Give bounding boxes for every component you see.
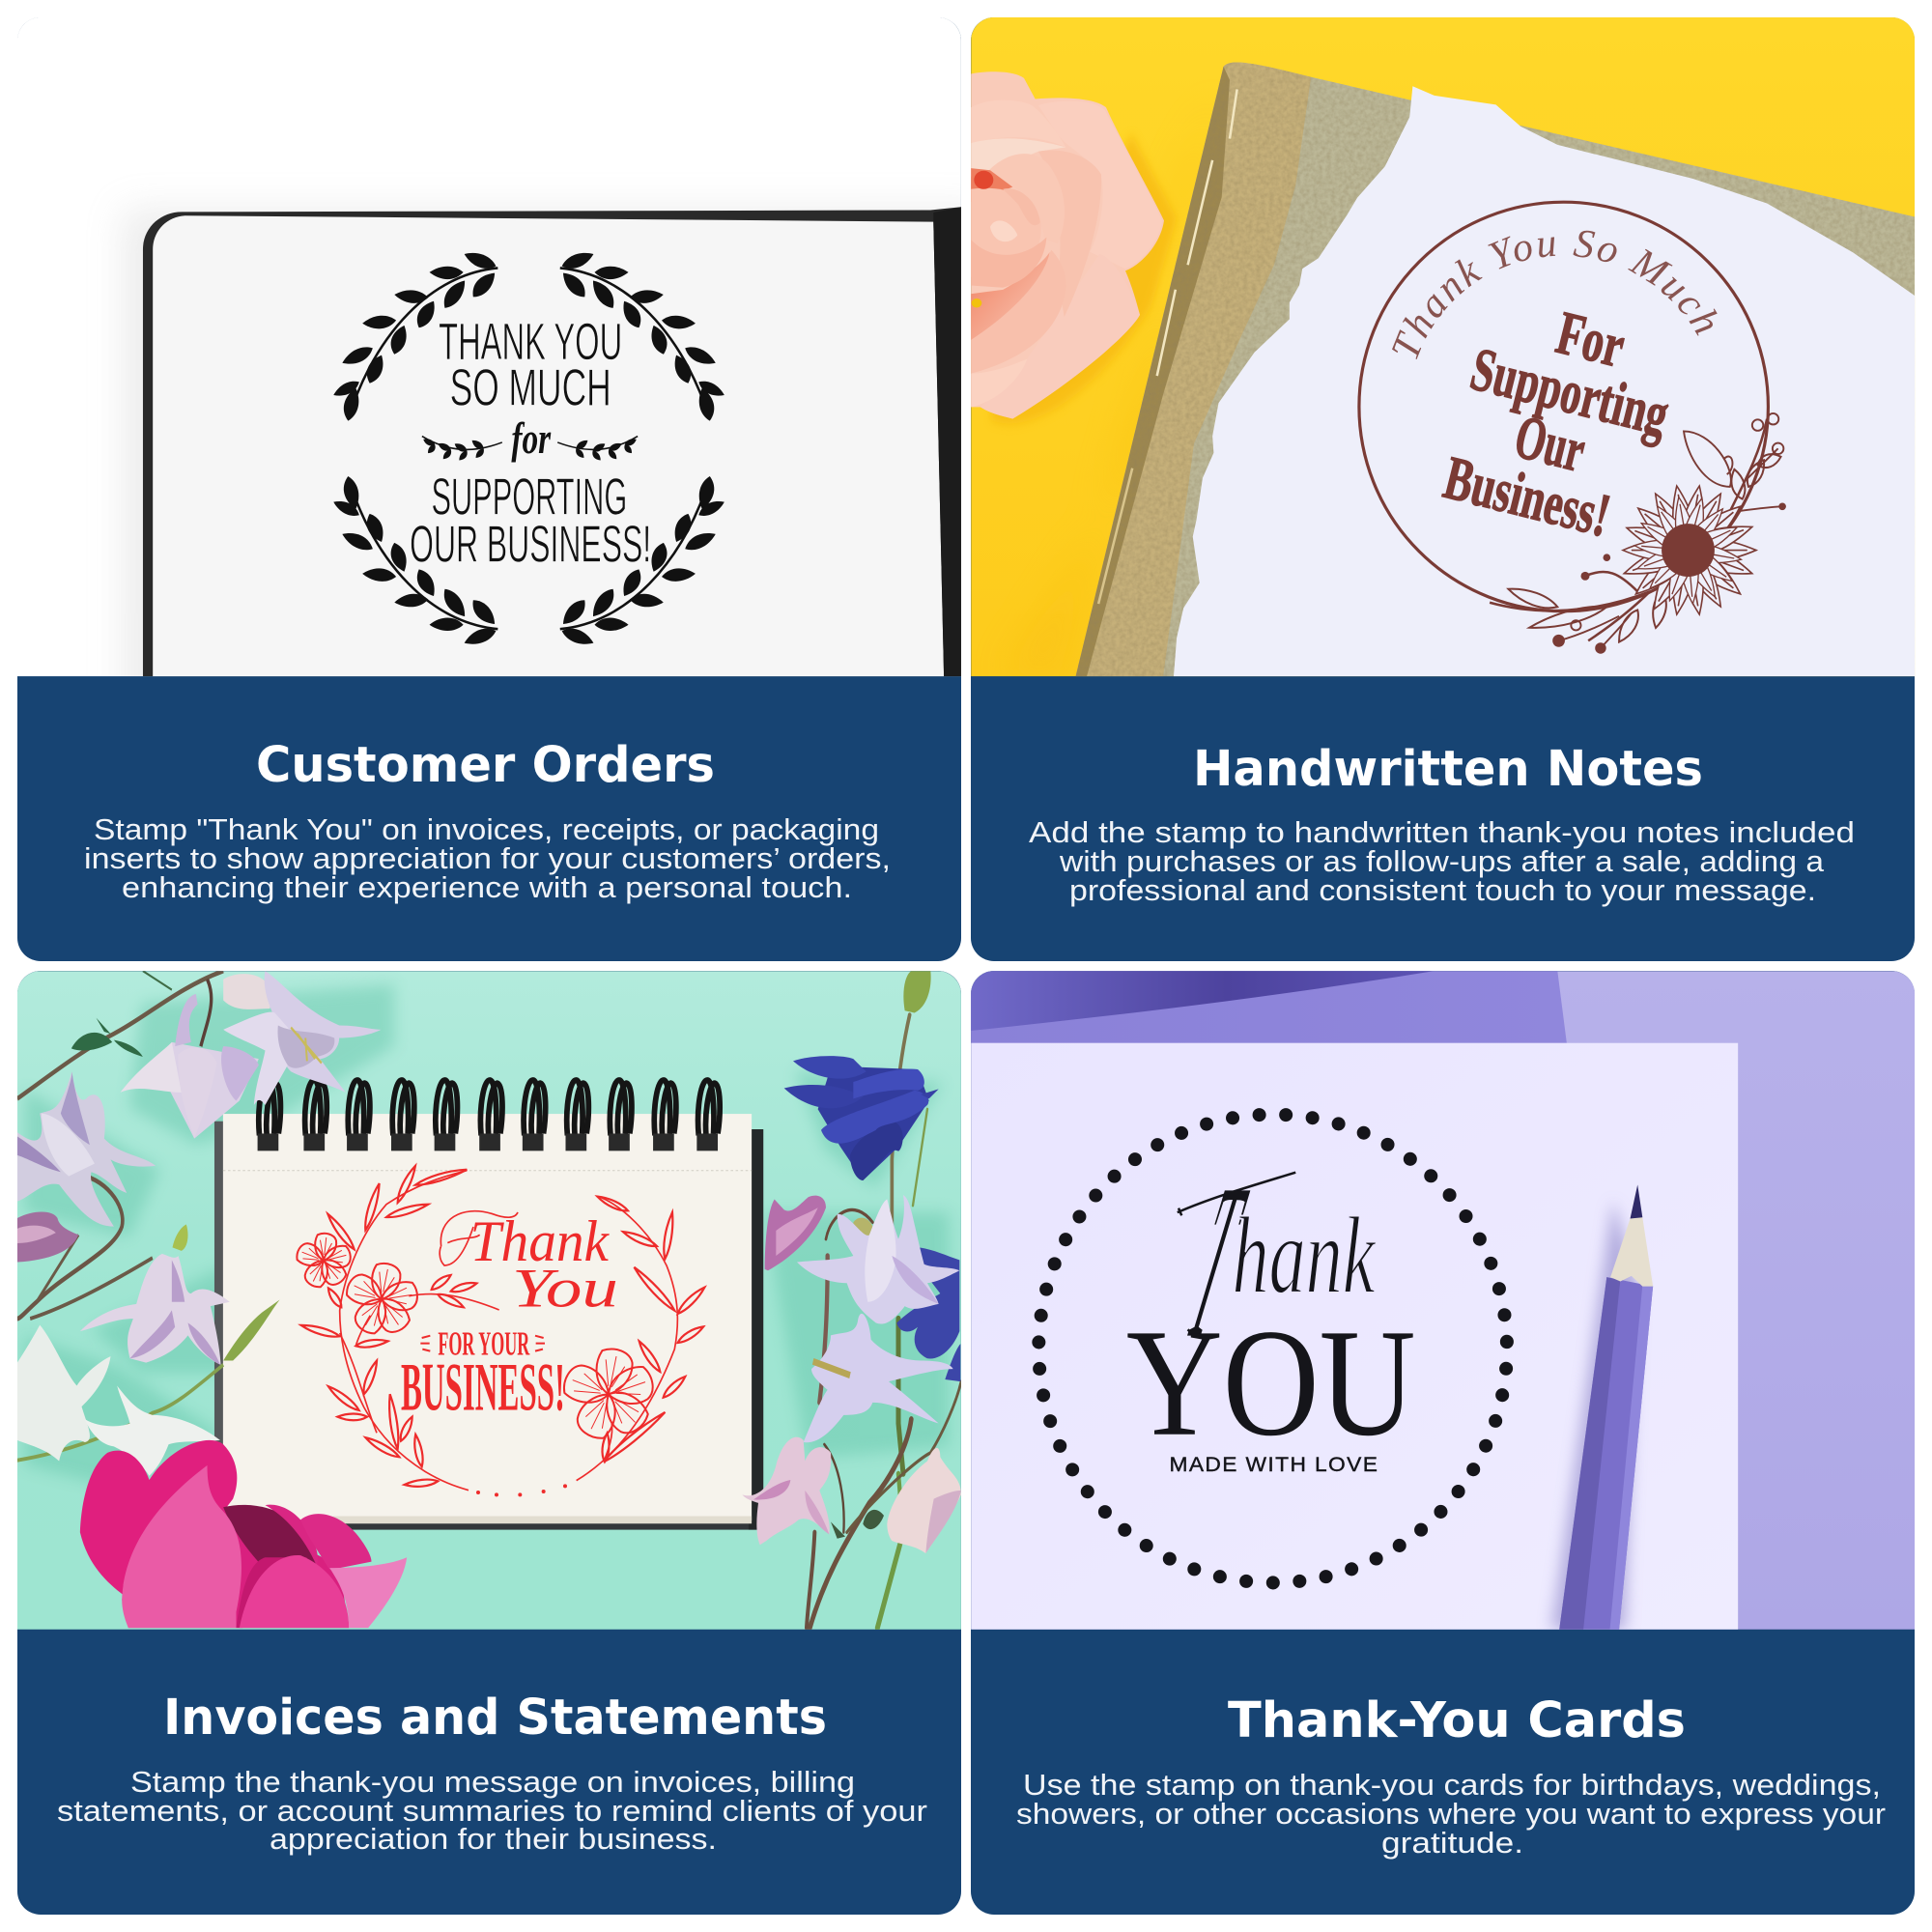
caption background: Customer Orders (17, 17, 961, 961)
description: Thank-You Cards: showers, or other occasions where you want to express your (1016, 1797, 1886, 1831)
stamp text: for (511, 413, 552, 463)
caption background: Handwritten Notes (971, 17, 1915, 961)
stamp: dotted ring (1032, 1108, 1514, 1589)
rose (971, 71, 1177, 424)
description: Invoices and Statements: Stamp the thank-you message on invoices, billing (130, 1765, 855, 1799)
stamp text: You (512, 1260, 618, 1320)
heading: Invoices and Statements: Invoices and Statements (163, 1690, 827, 1747)
stamp text: THANK YOU (439, 314, 622, 371)
spiral binding (258, 1080, 720, 1151)
heading: Handwritten Notes: Handwritten Notes (1193, 741, 1703, 798)
panel: Customer Orders (17, 17, 985, 961)
stamp text: FOR YOUR (438, 1325, 530, 1363)
description: Handwritten Notes: Add the stamp to handwritten thank-you notes included (1029, 815, 1855, 849)
stamp: script Thank: T (1166, 1139, 1266, 1384)
flowers right (742, 971, 961, 1628)
flowers left (17, 971, 382, 1476)
stamp: arc path (1416, 256, 1698, 363)
photo: black notebook with laurel stamp (17, 17, 961, 676)
stamp: rotated message: Supporting (1464, 334, 1675, 449)
panel: Thank-You Cards (971, 971, 1915, 1915)
icon: purple pencil (1551, 1184, 1653, 1630)
stamp text: OUR BUSINESS! (410, 517, 651, 574)
description: Thank-You Cards: gratitude. (1381, 1826, 1523, 1860)
description: Handwritten Notes (1029, 815, 1855, 907)
stamp: curved heading: Thank You So Much (1392, 230, 1718, 359)
description: Invoices and Statements: statements, or account summaries to remind clients of your (57, 1794, 927, 1828)
stamp: YOU: YOU (1126, 1298, 1416, 1468)
torn white paper (1174, 86, 1915, 676)
stamp text: Thank (470, 1209, 610, 1273)
stamp: red floral wreath (294, 1164, 707, 1496)
description: Customer Orders: Stamp "Thank You" on invoices, receipts, or packaging (94, 812, 879, 846)
stamp: circle frame (1359, 202, 1768, 611)
soft flower shadows (25, 984, 949, 1490)
heading: Thank-You Cards: Thank-You Cards (1228, 1692, 1686, 1749)
stamp: rotated message: For (1550, 298, 1632, 381)
photo: torn paper on yellow with sunflower stamp (971, 17, 1915, 676)
card (971, 1043, 1738, 1630)
description: Invoices and Statements (57, 1765, 927, 1856)
stamp text (401, 1209, 618, 1425)
photo: spiral notepad among flowers on teal (17, 971, 961, 1630)
stamp text: SO MUCH (450, 360, 611, 417)
description: Thank-You Cards: Use the stamp on thank-you cards for birthdays, weddings, (1023, 1768, 1881, 1802)
panel: Handwritten Notes (971, 17, 1915, 961)
caption background: Thank-You Cards (971, 971, 1915, 1915)
stamp: tagline: MADE WITH LOVE (1169, 1454, 1378, 1476)
heading: Customer Orders: Customer Orders (256, 737, 715, 794)
stamp: script Thank (1166, 1139, 1377, 1384)
caption background: Invoices and Statements (17, 971, 961, 1915)
description: Thank-You Cards (1016, 1768, 1886, 1860)
stamp: script Thank: hank (1233, 1194, 1377, 1317)
flower: pink peony (80, 1440, 407, 1628)
stamp text (410, 314, 651, 574)
description: Handwritten Notes: with purchases or as follow-ups after a sale, adding a (1059, 844, 1825, 878)
stamp: rotated message: Business! (1437, 442, 1617, 550)
panel: Invoices and Statements (17, 971, 961, 1915)
stamp: rotated message (1441, 311, 1669, 537)
description: Customer Orders: enhancing their experience with a personal touch. (122, 870, 852, 904)
stamp text: BUSINESS! (401, 1350, 565, 1425)
description: Handwritten Notes: professional and consistent touch to your message. (1069, 873, 1816, 907)
stamp: rotated message: Our (1508, 402, 1592, 485)
worn book (1076, 62, 1915, 676)
photo: lavender card with pencil (971, 971, 1915, 1630)
stamp: sunflower with branches (1490, 413, 1786, 654)
stamp: laurel wreath (331, 248, 726, 648)
description: Customer Orders: inserts to show appreciation for your customers’ orders, (84, 841, 891, 875)
description: Customer Orders (84, 812, 891, 904)
description: Invoices and Statements: appreciation for their business. (270, 1822, 717, 1856)
stamp text: SUPPORTING (431, 469, 627, 526)
notepad (214, 1114, 763, 1530)
envelope (971, 971, 1567, 1043)
book highlights (1098, 89, 1237, 604)
